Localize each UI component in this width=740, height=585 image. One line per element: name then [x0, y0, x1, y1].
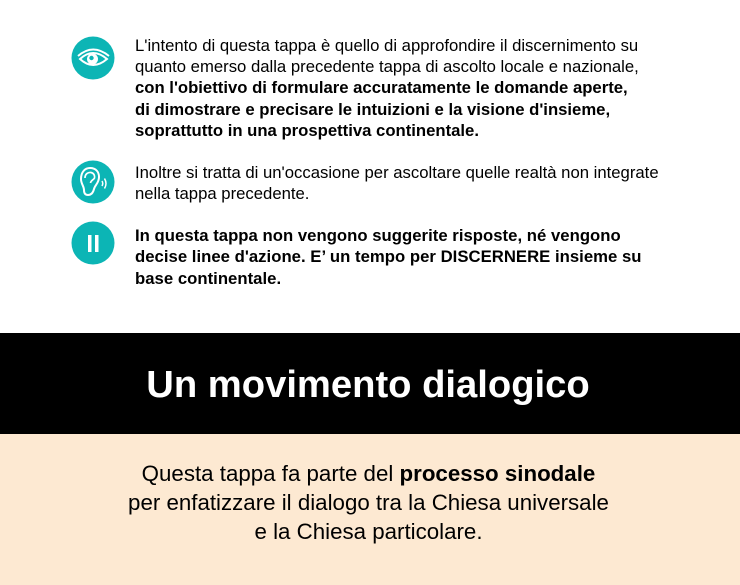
text: intent paragraph: di dimostrare e precisare le intuizioni e la visione d'insieme,: [135, 100, 610, 119]
text: intent paragraph: quanto emerso dalla precedente tappa di ascolto locale e nazionale,: [135, 57, 639, 76]
icon: eye: [72, 36, 114, 80]
panel: dialogue note: Questa tappa fa parte del processo sinodale: [142, 461, 595, 486]
heading band: Un movimento dialogico: [146, 363, 590, 406]
text: intent paragraph: L'intento di questa tappa è quello di approfondire il discernimento su: [135, 36, 638, 55]
icon: pause: [72, 222, 114, 264]
panel: dialogue note: e la Chiesa particolare.: [254, 519, 483, 544]
text: listening paragraph: nella tappa precedente.: [135, 184, 309, 203]
text: pause paragraph: decise linee d'azione. E’ un tempo per DISCERNERE insieme su: [135, 247, 642, 266]
heading band: [0, 333, 740, 434]
text: intent paragraph: soprattutto in una prospettiva continentale.: [135, 121, 479, 140]
text: intent paragraph: con l'obiettivo di formulare accuratamente le domande aperte,: [135, 78, 628, 97]
text: pause paragraph: [135, 226, 642, 288]
icon: ear: [72, 160, 114, 204]
text: pause paragraph: base continentale.: [135, 269, 281, 288]
panel: dialogue note: [0, 434, 740, 585]
text: pause paragraph: In questa tappa non vengono suggerite risposte, né vengono: [135, 226, 621, 245]
text: intent paragraph: [135, 36, 639, 140]
text: listening paragraph: Inoltre si tratta di un'occasione per ascoltare quelle realtà non integrate: [135, 163, 659, 182]
text: listening paragraph: [135, 163, 659, 203]
panel: dialogue note: per enfatizzare il dialogo tra la Chiesa universale: [128, 490, 609, 515]
